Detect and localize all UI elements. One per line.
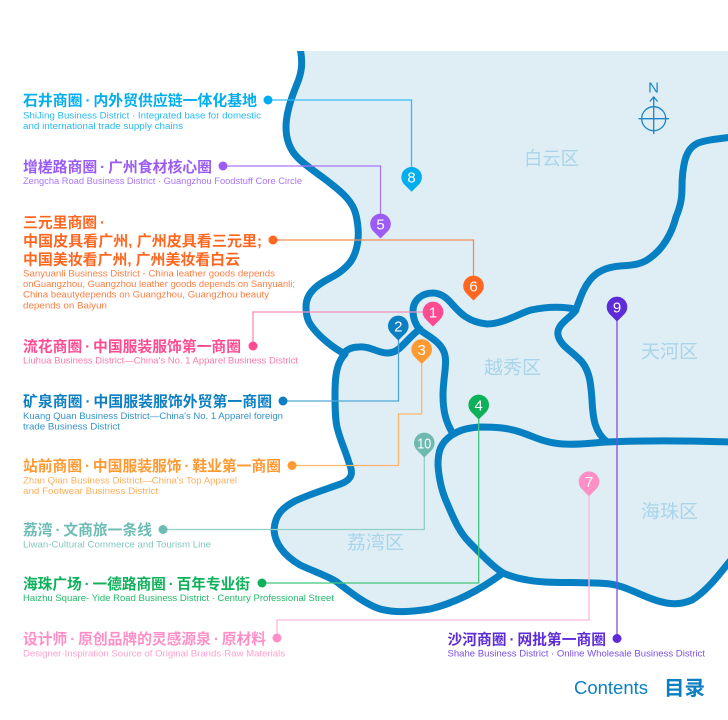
- label: Zhan Qian: [23, 457, 296, 496]
- label: Shahe: [448, 630, 705, 658]
- pin 2: [388, 316, 409, 340]
- district name: Yuexiu: 越秀区: [484, 357, 541, 378]
- pin 9: [607, 297, 627, 322]
- label: Liwan: 荔湾 · 文商旅一条线: [23, 521, 152, 539]
- label: Liwan: [23, 521, 211, 550]
- label: Zhan Qian: Zhan Qian Business District—China's Top Apparel: [23, 474, 237, 486]
- pin 8: 8: [407, 170, 416, 187]
- label: Designer: [23, 630, 285, 658]
- rivers and district boundaries: [274, 48, 728, 612]
- footer: contents heading: Contents: [574, 678, 648, 698]
- label: Kuang Quan: Kuang Quan Business District—China's No. 1 Apparel foreign: [23, 410, 283, 421]
- label: Kuang Quan: [23, 392, 288, 432]
- pin 1: [423, 302, 443, 326]
- pin 4: [468, 395, 489, 420]
- label: Liuhua: Liuhua Business District—China's No. 1 Apparel Business District: [23, 354, 298, 366]
- label: Liuhua: [23, 337, 298, 366]
- pin 3: [411, 339, 432, 364]
- leader line: Zhan Qian: [292, 360, 422, 466]
- label: Zengcha Road: 增槎路商圈 · 广州食材核心圈: [23, 158, 212, 176]
- label: Sanyuanli: 中国美妆看广州, 广州美妆看白云: [23, 250, 240, 268]
- label: Sanyuanli: 三元里商圈 ·: [23, 213, 105, 231]
- label: Zengcha Road: [23, 158, 302, 186]
- district name: Tianhe: 天河区: [641, 341, 698, 362]
- pin 4: 4: [475, 397, 483, 414]
- pin 3: 3: [418, 342, 426, 359]
- pin 5: 5: [376, 216, 385, 233]
- pin 10: [414, 433, 435, 458]
- label: Shijing: and international trade supply chains: [23, 120, 183, 131]
- pin 8: [401, 167, 422, 192]
- label: Liuhua: 流花商圈 · 中国服装服饰第一商圈: [23, 337, 241, 355]
- icon: north compass: [638, 80, 669, 134]
- label: Designer: 设计师 · 原创品牌的灵感源泉 · 原材料: [23, 630, 266, 648]
- pin 5: [370, 214, 391, 238]
- label: Zhan Qian: and Footwear Business District: [23, 485, 158, 496]
- district name: Haizhu: 海珠区: [641, 501, 698, 522]
- label: Sanyuanli: depends on Baiyun: [23, 299, 107, 310]
- pin 1: 1: [429, 304, 437, 321]
- leader line: Designer: [277, 490, 589, 638]
- district name: Liwan: 荔湾区: [347, 532, 404, 553]
- pin 10: 10: [417, 435, 431, 452]
- label: Sanyuanli: onGuangzhou, Guangzhou leather goods depends on Sanyuanli;: [23, 278, 295, 289]
- label: Kuang Quan: 矿泉商圈 · 中国服装服饰外贸第一商圈: [23, 392, 272, 410]
- leader line: Zengcha Road: [223, 166, 380, 218]
- label: Shijing: [23, 91, 272, 131]
- leader line: Shijing: [268, 100, 412, 170]
- label: Shahe: 沙河商圈 · 网批第一商圈: [448, 630, 606, 648]
- pin 6: [463, 276, 484, 300]
- district name: Baiyun: 白云区: [524, 148, 579, 169]
- label: Haizhu Square: [23, 575, 334, 603]
- leader line: Liuhua: [253, 312, 430, 346]
- label: Zengcha Road: Zengcha Road Business District · Guangzhou Foodstuff Core Circle: [23, 175, 302, 186]
- label: Kuang Quan: trade Business District: [23, 420, 120, 432]
- pin 9: 9: [613, 299, 621, 316]
- footer: contents heading: 目录: [664, 677, 705, 700]
- map base area: [274, 51, 728, 612]
- label: Haizhu Square: 海珠广场 · 一德路商圈 · 百年专业街: [23, 575, 250, 593]
- leader line: Liwan: [163, 452, 424, 530]
- label: Sanyuanli: [23, 213, 295, 310]
- leader line: Shahe: [616, 315, 618, 638]
- label: Zhan Qian: 站前商圈 · 中国服装服饰 · 鞋业第一商圈: [23, 457, 281, 475]
- label: Liwan: Liwan-Cultural Commerce and Tourism Line: [23, 538, 211, 550]
- icon: north compass: N: [648, 80, 659, 96]
- label: Designer: Designer·Inspiration Source of Original Brands·Raw Materials: [23, 648, 285, 658]
- pin 2: 2: [394, 318, 402, 335]
- label: Sanyuanli: Sanyuanli Business District - China leather goods depends: [23, 268, 275, 278]
- label: Shijing: 石井商圈 · 内外贸供应链一体化基地: [23, 91, 257, 109]
- pin 7: 7: [585, 474, 593, 491]
- pin 7: [579, 471, 599, 496]
- label: Shahe: Shahe Business District · Online Wholesale Business District: [448, 648, 705, 658]
- pin 6: 6: [469, 278, 478, 295]
- footer: contents heading: [574, 677, 705, 700]
- label: Sanyuanli: 中国皮具看广州, 广州皮具看三元里;: [23, 232, 262, 250]
- label: Haizhu Square: Haizhu Square- Yide Road Business District · Century Professional Street: [23, 592, 334, 603]
- label: Shijing: ShiJing Business District · Integrated base for domestic: [23, 109, 261, 120]
- label: Sanyuanli: China beautydepends on Guangzhou, Guangzhou beauty: [23, 288, 269, 300]
- leader line: Sanyuanli: [273, 240, 474, 280]
- leader line: Haizhu Square: [262, 415, 479, 583]
- leader line: Kuang Quan: [283, 335, 398, 401]
